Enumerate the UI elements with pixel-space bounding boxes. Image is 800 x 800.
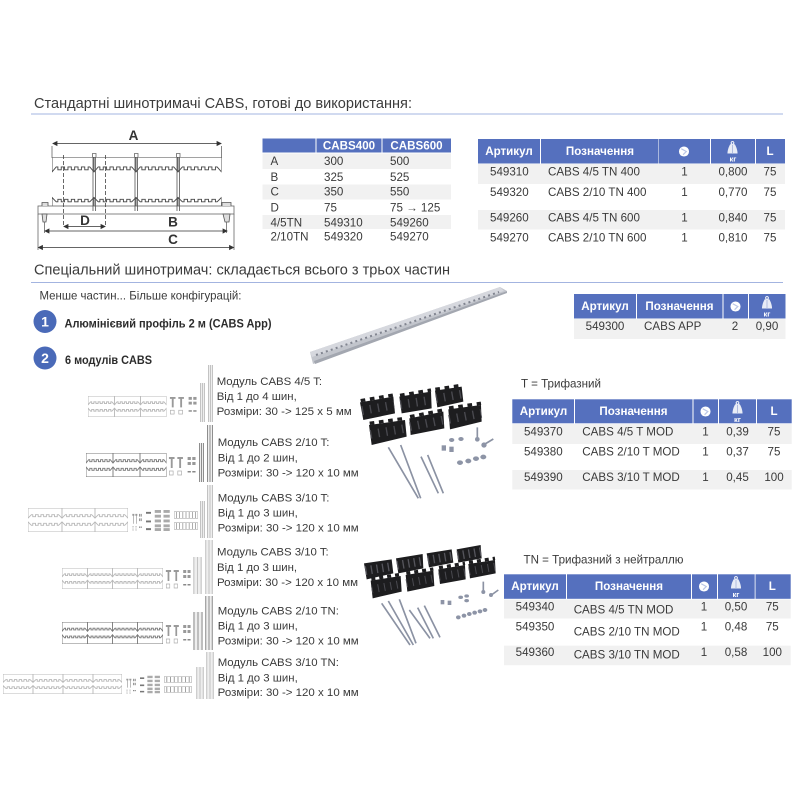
table: standard holders articles: 75 [764,232,776,245]
table: dimensions CABS400 / CABS600: CABS600 [390,140,443,152]
step 2: six modules [34,346,152,370]
caption: Розміри: 30 -> 120 x 10 мм [217,577,358,589]
table: standard holders articles: 549260 [490,212,529,225]
table: CABS APP [574,294,786,339]
step 1: aluminium profile: 1 [41,314,49,330]
drawing [88,365,213,422]
table: CABS APP: Позначення [645,300,714,313]
dimension letters: D [80,213,90,228]
table: dimensions CABS400 / CABS600: B [270,171,278,184]
table: standard holders articles: 75 [764,186,776,199]
table: dimensions CABS400 / CABS600: 500 [390,155,409,168]
table: standard holders articles: Позначення [566,145,634,158]
drawing [3,652,214,699]
caption: Від 1 до 3 шин, [218,620,298,632]
dimension letters: B [168,215,178,230]
caption [218,605,359,647]
table: standard holders articles: кг [730,154,736,164]
table: dimensions CABS400 / CABS600: 549270 [390,231,429,244]
intro text: Менше частин... Більше конфігурацій: [40,290,242,302]
table: TN modules: CABS 4/5 TN MOD [574,603,673,616]
table: T modules: L [770,405,778,418]
bolts [42,202,231,222]
caption [218,657,359,699]
dashed D guides [64,155,106,227]
table: standard holders articles: CABS 2/10 TN 400 [548,186,646,199]
table: standard holders articles: 0,800 [718,166,748,179]
table: TN modules: Позначення [595,580,663,593]
table: dimensions CABS400 / CABS600: D [270,202,279,215]
caption: Модуль CABS 3/10 TN: [218,657,339,669]
table: T modules: CABS 4/5 T MOD [582,426,673,439]
caption: Розміри: 30 -> 120 x 10 мм [218,687,359,699]
dimension letters: C [168,232,178,247]
upper jaw [52,157,222,172]
table: dimensions CABS400 / CABS600: 300 [324,155,343,168]
table: T modules: 0,45 [726,471,749,484]
heading: standard holders: Стандартні шинотримачі CABS, готові до використання: [34,96,412,112]
dimension letters: A [129,128,139,143]
caption: Модуль CABS 3/10 T: [218,492,329,504]
table: CABS APP: кг [764,310,770,318]
table: standard holders articles: 549270 [490,232,529,245]
caption: Від 1 до 3 шин, [218,508,298,520]
table: standard holders articles: Артикул [485,145,533,158]
table: TN modules [504,574,791,665]
caption [217,376,352,418]
table: T modules: 1 [702,446,709,459]
table: dimensions CABS400 / CABS600: CABS400 [323,140,375,152]
module 2: CABS 2/10 T [86,425,359,482]
caption: Розміри: 30 -> 120 x 10 мм [218,523,359,535]
table: standard holders articles: 1 [681,212,688,225]
label: T = three-phase: T = Трифазний [521,378,601,391]
module 5: CABS 2/10 TN [62,596,359,650]
table: TN modules: 0,58 [725,646,747,659]
table: TN modules: 75 [766,621,779,634]
table: T modules: Артикул [520,405,567,418]
table: dimensions CABS400 / CABS600: 4/5TN [270,217,302,230]
table: T modules: 75 [768,446,780,459]
table: T modules: 549390 [524,471,563,484]
module 4: CABS 3/10 T [62,540,358,594]
photo: aluminium rail [310,287,507,364]
table: dimensions CABS400 / CABS600: 549260 [390,217,429,230]
caption: Від 1 до 3 шин, [217,562,297,574]
table: TN modules: 0,50 [725,601,747,614]
caption: Розміри: 30 -> 120 x 10 мм [218,468,359,480]
caption [217,547,358,589]
drawing [86,425,213,482]
table: standard holders articles: 549310 [490,166,529,179]
table: CABS APP: Артикул [581,300,629,313]
dimension letters [80,128,178,247]
caption: Модуль CABS 2/10 T: [218,437,329,449]
table: TN modules: Артикул [511,580,559,593]
table: TN modules: 1 [701,601,707,614]
table: TN modules: 75 [766,601,779,614]
table: dimensions CABS400 / CABS600: 549310 [324,217,363,230]
table: TN modules: 549350 [516,621,554,634]
table: T modules: CABS 3/10 T MOD [582,471,680,484]
caption [218,492,359,535]
drawing [28,485,213,538]
table: T modules: CABS 2/10 T MOD [582,446,680,459]
step 1: aluminium profile: Алюмінієвий профіль 2 м (CABS App) [64,318,272,330]
drawing [62,596,213,650]
table: TN modules: 549360 [516,646,554,659]
table: standard holders articles: 549320 [490,186,529,199]
photo: TN module kit [364,545,498,645]
photo: T module kit [360,385,493,498]
table: T modules: 0,39 [726,426,749,439]
table: TN modules: CABS 2/10 TN MOD [574,626,680,639]
table: TN modules: L [769,580,776,593]
table: dimensions CABS400 / CABS600: 75 → 125 [390,202,440,215]
label: TN = three-phase with neutral: TN = Трифазний з нейтраллю [524,553,684,566]
module 6: CABS 3/10 TN [3,652,359,699]
table: CABS APP: CABS APP [644,320,702,333]
table: TN modules: CABS 3/10 TN MOD [574,648,680,661]
dimension drawing of busbar holder [38,128,234,250]
table: CABS APP: 549300 [586,320,624,333]
table: dimensions CABS400 / CABS600: 325 [324,171,343,184]
step 1: aluminium profile [34,310,272,333]
table: dimensions CABS400 / CABS600: 550 [390,186,409,199]
vertical posts [93,157,180,211]
caption: Модуль CABS 3/10 T: [217,547,329,559]
table: T modules: кг [734,415,741,424]
arrow C [38,246,234,250]
arrow B [45,229,227,233]
caption [218,437,359,480]
table: TN modules: 1 [701,646,707,659]
table: TN modules: кг [733,590,739,599]
caption: Від 1 до 2 шин, [218,452,298,464]
table: T modules: 75 [768,426,780,439]
table: T modules: 100 [764,471,784,484]
caption: Від 1 до 3 шин, [218,672,298,684]
table: T modules: 1 [702,471,709,484]
table: standard holders articles: 75 [764,212,776,225]
table: dimensions CABS400 / CABS600: 75 [324,202,337,215]
table: standard holders articles: 1 [681,166,688,179]
table: T modules: 0,37 [726,446,749,459]
table: standard holders articles: 0,810 [718,232,748,245]
table: T modules [512,399,792,490]
table: standard holders articles: 0,770 [718,186,748,199]
step 2: six modules: 6 модулів CABS [65,354,152,367]
heading: special holder: Спеціальний шинотримач: складається всього з трьох частин [34,263,450,279]
table: dimensions CABS400 / CABS600: 2/10TN [270,231,309,244]
table: standard holders articles: CABS 2/10 TN 600 [548,232,646,245]
caption: Модуль CABS 4/5 T: [217,376,322,388]
table: standard holders articles [478,139,785,245]
table: TN modules: 100 [763,646,782,659]
base plate [38,206,234,214]
table: standard holders articles: CABS 4/5 TN 400 [548,166,640,179]
caption: Від 1 до 4 шин, [217,391,297,403]
table: CABS APP: 2 [732,320,738,333]
table: T modules: 1 [702,426,709,439]
table: standard holders articles: 0,840 [718,212,748,225]
arrow A [53,142,221,146]
table: TN modules: 0,48 [725,621,747,634]
caption: Розміри: 30 -> 125 x 5 мм [217,406,352,418]
table: T modules: 549380 [524,446,563,459]
table: dimensions CABS400 / CABS600: C [270,186,279,199]
table: T modules: 549370 [524,426,563,439]
table: standard holders articles: 1 [681,186,688,199]
table: T modules: Позначення [599,405,668,418]
table: TN modules: 1 [701,621,707,634]
caption: Розміри: 30 -> 120 x 10 мм [218,635,359,647]
table: standard holders articles: CABS 4/5 TN 600 [548,212,640,225]
step 2: six modules: 2 [41,350,49,366]
lower jaw [52,197,222,210]
table: TN modules: 549340 [516,601,554,614]
table: dimensions CABS400 / CABS600: 525 [390,171,409,184]
drawing [62,540,213,594]
table: dimensions CABS400 / CABS600: 549320 [324,231,363,244]
table: standard holders articles: L [766,145,774,158]
module 3: CABS 3/10 T [28,485,359,538]
table: dimensions CABS400 / CABS600: 350 [324,186,343,199]
arrow D [64,224,105,228]
table: dimensions CABS400 / CABS600: A [270,155,278,168]
extension lines [38,146,234,250]
table: standard holders articles: 75 [764,166,776,179]
table: CABS APP: 0,90 [756,320,778,333]
table: dimensions CABS400 / CABS600 [262,138,451,244]
caption: Модуль CABS 2/10 TN: [218,605,339,617]
module 1: CABS 4/5 T [88,365,352,422]
table: standard holders articles: 1 [681,232,688,245]
